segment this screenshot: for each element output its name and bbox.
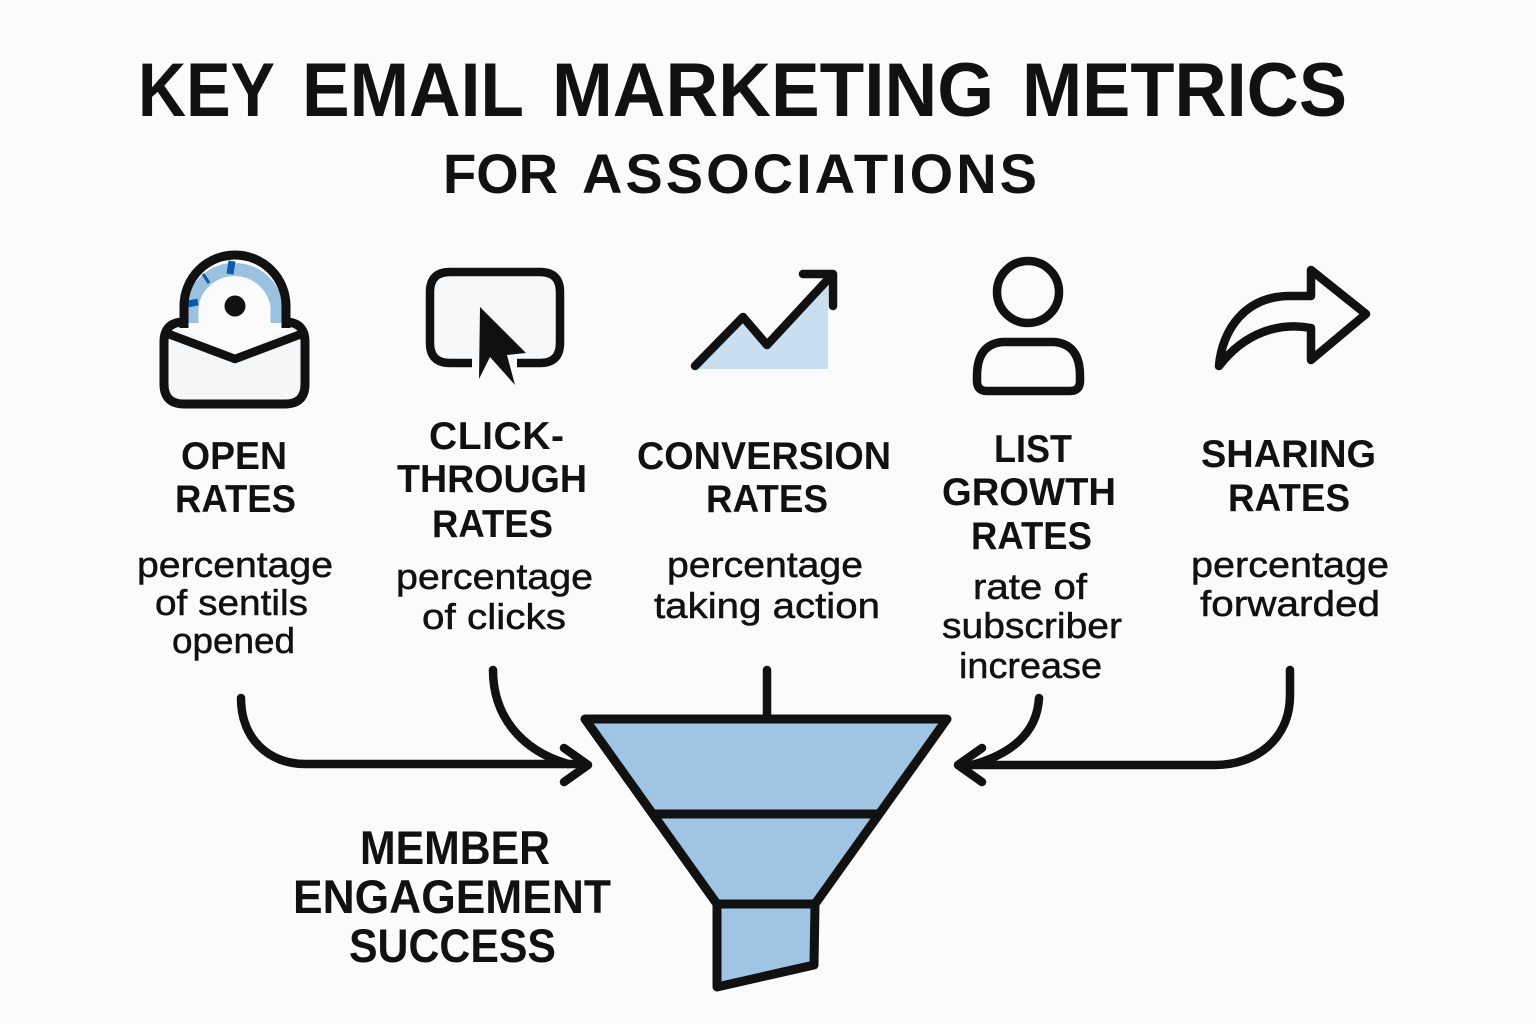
panel: click-through rates: [396, 272, 593, 637]
icon: envelope with gauge: [164, 255, 305, 404]
description: sharing rates: percentage: [1191, 544, 1389, 585]
label: member engagement success: SUCCESS: [349, 919, 556, 972]
description: list growth rates: [942, 566, 1122, 686]
heading: open rates: RATES: [175, 478, 296, 521]
heading: sharing rates: SHARING: [1201, 433, 1376, 476]
description: sharing rates: [1191, 544, 1389, 624]
description: open rates: [137, 544, 333, 661]
icon: rising chart arrow: [695, 274, 833, 369]
description: conversion rates: taking action: [654, 585, 880, 626]
description: list growth rates: subscriber: [942, 605, 1122, 646]
heading: click-through rates: [397, 415, 587, 546]
title: MARKETING: [552, 48, 994, 133]
heading: list growth rates: LIST: [994, 428, 1072, 471]
arrow: click-through rates to funnel: [493, 670, 568, 764]
heading: conversion rates: [637, 435, 891, 521]
panel: sharing rates: [1191, 270, 1389, 624]
heading: open rates: OPEN: [181, 435, 287, 478]
panel: conversion rates: [637, 274, 891, 626]
panel: open rates: [137, 255, 333, 661]
heading: conversion rates: RATES: [706, 478, 828, 521]
heading: conversion rates: CONVERSION: [637, 435, 891, 478]
subtitle: ASSOCIATIONS: [582, 142, 1037, 205]
description: open rates: percentage: [137, 544, 333, 585]
description: open rates: of sentils: [155, 582, 308, 623]
heading: sharing rates: RATES: [1228, 477, 1350, 520]
description: click-through rates: of clicks: [422, 596, 566, 637]
description: conversion rates: percentage: [667, 544, 863, 585]
description: click-through rates: percentage: [396, 556, 593, 597]
label: member engagement success: ENGAGEMENT: [293, 870, 611, 923]
panel: list growth rates: [942, 261, 1122, 686]
funnel: [585, 719, 947, 987]
title: KEY: [138, 48, 275, 133]
icon: share arrow: [1219, 270, 1366, 366]
description: click-through rates: [396, 556, 593, 637]
title: [138, 48, 1347, 133]
heading: list growth rates: [942, 428, 1116, 558]
description: open rates: opened: [172, 620, 295, 661]
heading: click-through rates: THROUGH: [397, 458, 587, 501]
title: METRICS: [1022, 48, 1347, 133]
arrow: open rates to funnel: [241, 698, 588, 782]
description: conversion rates: [654, 544, 880, 626]
label: member engagement success: [293, 821, 611, 972]
title: EMAIL: [302, 48, 524, 133]
heading: click-through rates: CLICK-: [429, 415, 564, 458]
description: sharing rates: forwarded: [1200, 583, 1380, 624]
heading: click-through rates: RATES: [432, 503, 553, 546]
heading: open rates: [175, 435, 296, 521]
icon: person: [977, 261, 1080, 391]
subtitle: FOR: [443, 142, 558, 205]
heading: sharing rates: [1201, 433, 1376, 520]
icon: cursor in rounded box: [430, 272, 560, 385]
arrow: sharing rates to funnel: [958, 670, 1290, 782]
description: list growth rates: rate of: [973, 566, 1088, 607]
arrow: list growth rates to funnel: [972, 698, 1039, 765]
label: member engagement success: MEMBER: [360, 821, 550, 874]
heading: list growth rates: GROWTH: [942, 471, 1116, 514]
description: list growth rates: increase: [959, 645, 1102, 686]
heading: list growth rates: RATES: [971, 515, 1092, 558]
arrow: conversion rates to funnel: [763, 670, 771, 716]
